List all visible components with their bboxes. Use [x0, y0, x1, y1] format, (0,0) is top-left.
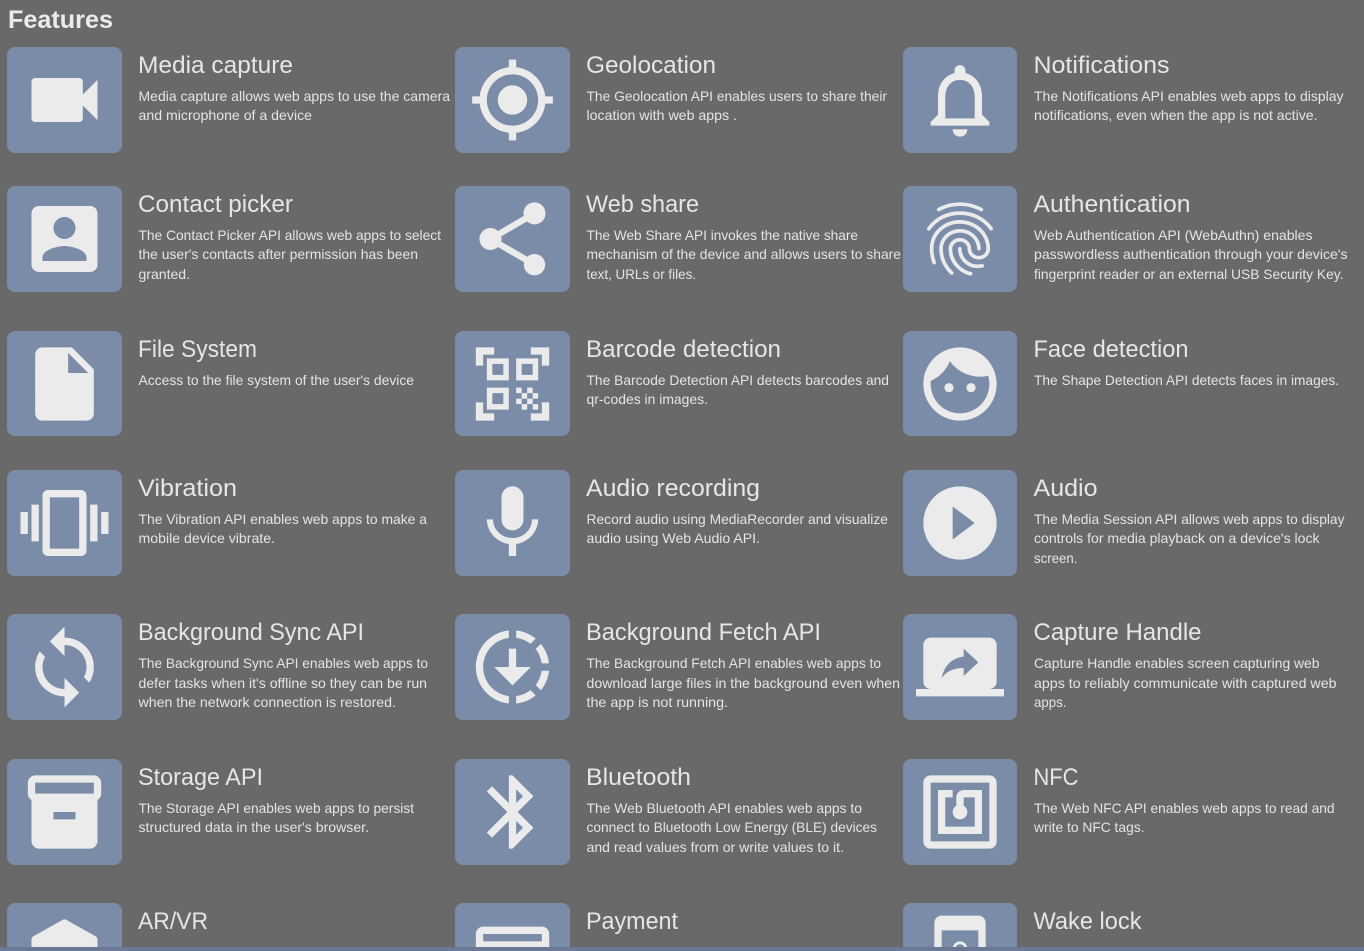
icon: file — [7, 331, 122, 436]
icon: download progress circle — [455, 614, 570, 720]
card: Audio — [903, 470, 1344, 576]
description: Web Authentication API (WebAuthn) enables — [1034, 227, 1312, 243]
icon: location target — [455, 47, 570, 153]
card: Background Sync API — [7, 614, 428, 720]
card: File System — [7, 331, 414, 436]
description: when the network connection is restored. — [137, 694, 396, 710]
card: Authentication — [903, 186, 1348, 292]
description: The Background Sync API enables web apps to — [138, 655, 428, 671]
card: Bluetooth — [455, 759, 877, 865]
icon: video camera — [7, 47, 122, 153]
description: Media capture allows web apps to use the camera — [138, 88, 450, 104]
description: Access to the file system of the user's device — [138, 372, 414, 388]
description — [1034, 511, 1344, 566]
heading: Audio recording — [586, 475, 760, 502]
description: The Storage API enables web apps to persist — [138, 800, 414, 816]
description — [586, 372, 889, 407]
description: defer tasks when it's offline so they can be run — [138, 675, 427, 691]
icon: face — [903, 331, 1017, 436]
description — [138, 227, 441, 282]
description: audio using Web Audio API. — [586, 530, 760, 546]
title: Features — [8, 6, 113, 34]
description — [586, 227, 901, 282]
heading: Web share — [586, 191, 699, 218]
card: Payment — [455, 903, 678, 951]
card: Capture Handle — [903, 614, 1337, 720]
card: Storage API — [7, 759, 414, 865]
icon: NFC tag — [903, 759, 1017, 865]
heading: Contact picker — [138, 191, 293, 218]
description: and read values from or write values to it. — [586, 839, 844, 855]
description: The Web NFC API enables web apps to read and — [1034, 800, 1334, 816]
heading: Background Fetch API — [586, 619, 821, 646]
card: Face detection — [903, 331, 1339, 436]
description: screen. — [1034, 550, 1078, 566]
bottom navigation strip — [0, 947, 1364, 951]
icon: fingerprint — [903, 186, 1017, 292]
description: notifications, even when the app is not active. — [1034, 107, 1318, 123]
description: The Background Fetch API enables web apps to — [586, 655, 881, 671]
icon: bell — [903, 47, 1017, 153]
heading: Media capture — [138, 52, 293, 79]
icon: screen share laptop — [903, 614, 1017, 720]
description: download large files in the background even when — [586, 675, 900, 691]
description — [1034, 88, 1344, 123]
description — [1033, 800, 1334, 835]
icon: sync arrows — [7, 614, 122, 720]
card: Geolocation — [455, 47, 887, 153]
description — [138, 511, 427, 546]
heading: Authentication — [1034, 191, 1190, 218]
description: passwordless authentication through your device's — [1034, 246, 1348, 262]
description: write to NFC tags. — [1033, 819, 1144, 835]
card: Web share — [455, 186, 901, 292]
description: apps to reliably communicate with captured web — [1034, 675, 1337, 691]
heading: NFC — [1034, 764, 1078, 791]
icon: credit card — [455, 903, 570, 947]
description: The Contact Picker API allows web apps to select — [138, 227, 441, 243]
description: and microphone of a device — [138, 107, 312, 123]
icon: contact box — [7, 186, 122, 292]
description: The Web Share API invokes the native share — [586, 227, 858, 243]
description — [586, 655, 900, 710]
heading: File System — [138, 336, 257, 363]
heading: Vibration — [138, 475, 237, 502]
heading: Barcode detection — [586, 336, 781, 363]
description: apps. — [1034, 694, 1066, 710]
card: Barcode detection — [455, 331, 889, 436]
description: the app is not running. — [586, 694, 728, 710]
description: Record audio using MediaRecorder and visualize — [586, 511, 888, 527]
card: Media capture — [7, 47, 450, 153]
card: Vibration — [7, 470, 427, 576]
description: text, URLs or files. — [586, 266, 696, 282]
description: The Barcode Detection API detects barcodes and — [586, 372, 889, 388]
description — [138, 88, 450, 123]
heading: AR/VR — [138, 908, 208, 935]
description — [138, 800, 414, 835]
heading: Payment — [586, 908, 678, 935]
description: mobile device vibrate. — [138, 530, 275, 546]
description: location with web apps . — [586, 107, 737, 123]
description — [1034, 227, 1348, 282]
description: The Media Session API allows web apps to display — [1034, 511, 1344, 527]
heading: Background Sync API — [138, 619, 364, 646]
card: Background Fetch API — [455, 614, 900, 720]
card: Audio recording — [455, 470, 888, 576]
description: The Shape Detection API detects faces in images. — [1034, 372, 1339, 388]
description — [586, 88, 887, 123]
icon: microphone — [455, 470, 570, 576]
heading: Geolocation — [586, 52, 716, 79]
description: The Web Bluetooth API enables web apps to — [586, 800, 862, 816]
icon: cube — [7, 903, 122, 947]
heading: Audio — [1034, 475, 1098, 502]
description — [1034, 655, 1337, 710]
description: The Vibration API enables web apps to make a — [138, 511, 427, 527]
description: The Notifications API enables web apps to display — [1034, 88, 1344, 104]
description: structured data in the user's browser. — [138, 819, 369, 835]
description — [586, 800, 877, 855]
heading: Capture Handle — [1034, 619, 1202, 646]
description: the user's contacts after permission has been — [138, 246, 418, 262]
heading: Wake lock — [1034, 908, 1142, 935]
heading: Face detection — [1034, 336, 1188, 363]
heading: Storage API — [138, 764, 263, 791]
icon: storage box — [7, 759, 122, 865]
description — [586, 511, 888, 546]
description: qr-codes in images. — [586, 391, 708, 407]
card: Notifications — [903, 47, 1344, 153]
description: connect to Bluetooth Low Energy (BLE) devices — [586, 819, 877, 835]
icon: play button — [903, 470, 1017, 576]
card: Contact picker — [7, 186, 441, 292]
description: fingerprint reader or an external USB Security Key. — [1034, 266, 1344, 282]
icon: QR code scanner — [455, 331, 570, 436]
description: The Geolocation API enables users to share their — [586, 88, 887, 104]
icon: vibrating phone — [7, 470, 122, 576]
icon: bluetooth — [455, 759, 570, 865]
description: granted. — [138, 266, 190, 282]
heading: Bluetooth — [586, 764, 691, 791]
description: mechanism of the device and allows users to share — [586, 246, 901, 262]
heading: Notifications — [1034, 52, 1170, 79]
card: NFC — [903, 759, 1334, 865]
card: AR/VR — [7, 903, 208, 951]
description: controls for media playback on a device's lock — [1034, 530, 1320, 546]
description: Capture Handle enables screen capturing web — [1034, 655, 1320, 671]
icon: locked phone — [903, 903, 1017, 947]
icon: share — [455, 186, 570, 292]
card: Wake lock — [903, 903, 1142, 951]
description — [137, 655, 428, 710]
